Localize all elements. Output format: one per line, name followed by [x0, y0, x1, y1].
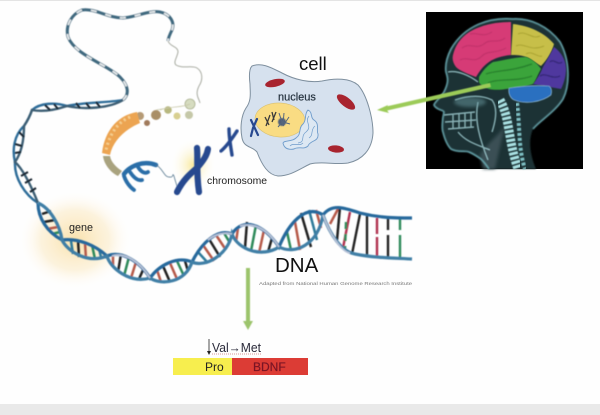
strand A	[38, 203, 412, 278]
brain lobe: frontal (pink)	[453, 22, 511, 77]
label: BDNF: BDNF	[253, 360, 286, 374]
base pairs	[42, 207, 340, 282]
arrow shaft	[246, 268, 250, 322]
mutation marker arrow	[207, 339, 211, 355]
spine highlight	[517, 103, 525, 169]
unwinding DNA ribbon	[14, 10, 202, 203]
label: DNA: DNA	[275, 254, 319, 277]
strand B	[38, 203, 412, 282]
frontal folds	[460, 32, 506, 60]
ribbon upper loop	[67, 10, 173, 100]
label: gene: gene	[69, 222, 93, 234]
head silhouette	[434, 19, 568, 169]
temporal folds	[486, 64, 532, 83]
arrow shaft	[384, 83, 491, 111]
occipital folds	[540, 61, 562, 77]
skull glow outline	[434, 19, 568, 169]
label: Val to Met: Val→Met	[212, 341, 262, 355]
black background	[426, 12, 583, 169]
cell	[241, 65, 373, 176]
orange coil texture	[106, 117, 130, 150]
brain lobe: temporal (green)	[479, 57, 541, 90]
nucleolus	[278, 118, 286, 126]
spine	[500, 100, 518, 169]
endoplasmic reticulum	[283, 110, 318, 149]
brain lobe: occipital (purple)	[533, 47, 566, 89]
bottom grey band	[0, 404, 600, 415]
brain lobe: parietal (yellow)	[511, 24, 554, 66]
mitochondrion right	[334, 92, 358, 112]
top edge line	[0, 0, 600, 1]
blue coil loops	[124, 167, 148, 190]
brain lobe: cerebellum (blue)	[509, 86, 552, 102]
dark neck area	[480, 125, 505, 169]
ribbon upper highlights	[67, 10, 173, 100]
label: nucleus: nucleus	[278, 92, 316, 104]
orange coil	[102, 112, 140, 155]
source credit: Adapted from National Human Genome Research Institute	[259, 281, 412, 287]
chromosome small	[221, 129, 237, 155]
chromosome at nucleus edge	[251, 119, 258, 136]
mitochondrion upper	[264, 77, 286, 89]
blue coil	[124, 163, 156, 174]
thin link to chromosome	[156, 165, 177, 186]
BDNF segment	[232, 358, 308, 375]
mitochondrion lower	[328, 145, 344, 153]
unzipped bases	[343, 212, 400, 259]
arrow head	[377, 105, 389, 113]
chromatin fibre	[102, 112, 177, 190]
label: Pro: Pro	[205, 360, 224, 374]
chromosome glow	[170, 138, 216, 192]
strand highlights	[112, 215, 350, 278]
label: chromosome: chromosome	[207, 176, 267, 187]
head scan image	[426, 12, 583, 169]
label: cell: cell	[299, 53, 327, 74]
chromosome large	[177, 148, 208, 192]
ribbon rungs	[15, 102, 100, 192]
parietal folds	[516, 33, 544, 56]
cell body	[241, 65, 373, 176]
nucleolus strands	[278, 113, 290, 127]
nucleus	[254, 101, 306, 139]
ribbon helix strands	[14, 100, 123, 203]
nucleosome beads	[136, 99, 195, 126]
arrow head	[243, 321, 253, 330]
gene glow	[18, 190, 132, 290]
skull and face bones	[444, 72, 496, 160]
spell-check underline	[212, 353, 261, 355]
cheek haze	[454, 97, 486, 107]
DNA double helix	[38, 203, 412, 282]
BDNF gene bar	[173, 358, 308, 375]
arrow: brain to cell	[377, 83, 491, 113]
ribbon thin tail	[168, 41, 202, 103]
tan coil	[103, 156, 122, 176]
ER folds	[290, 116, 315, 146]
Pro segment	[173, 358, 232, 375]
chromosomes in nucleus	[265, 112, 276, 126]
arrow: DNA to BDNF	[243, 268, 253, 330]
